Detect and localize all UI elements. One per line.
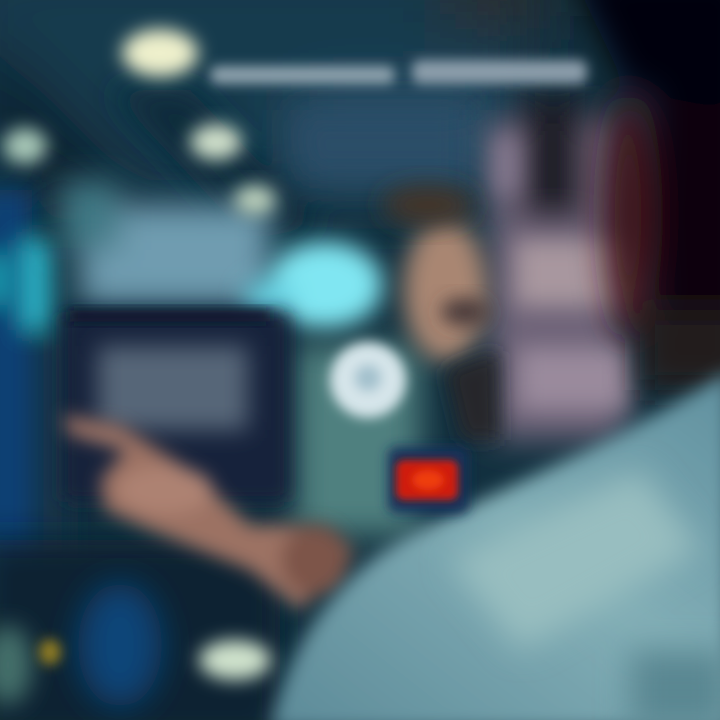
lower left desk area [0, 540, 280, 720]
monitor [62, 310, 290, 502]
foreground head silhouette [570, 0, 720, 390]
right wall panel [490, 95, 625, 440]
shirt highlight [450, 470, 720, 720]
green corner [0, 625, 32, 705]
red icon [388, 447, 468, 513]
blue object [78, 583, 162, 707]
monitor screen [98, 346, 248, 430]
pale wall region [60, 180, 270, 305]
ceiling background [0, 0, 550, 230]
central teal panel [295, 345, 420, 535]
shoulder of foreground person [270, 370, 720, 720]
ceiling beams [110, 90, 470, 240]
hair [382, 185, 474, 225]
white desk light [199, 640, 271, 680]
pointing hand and arm [62, 415, 355, 610]
blurred headline band [210, 60, 587, 84]
ceiling lights [3, 29, 276, 215]
eyes [441, 298, 489, 326]
yellow indicator [39, 639, 61, 665]
left blue server column [0, 190, 70, 610]
man's face [382, 185, 500, 440]
white circular icon [330, 342, 406, 418]
beard [445, 350, 500, 440]
right panel light bars [495, 135, 633, 410]
cyan cloud glow [244, 241, 383, 329]
